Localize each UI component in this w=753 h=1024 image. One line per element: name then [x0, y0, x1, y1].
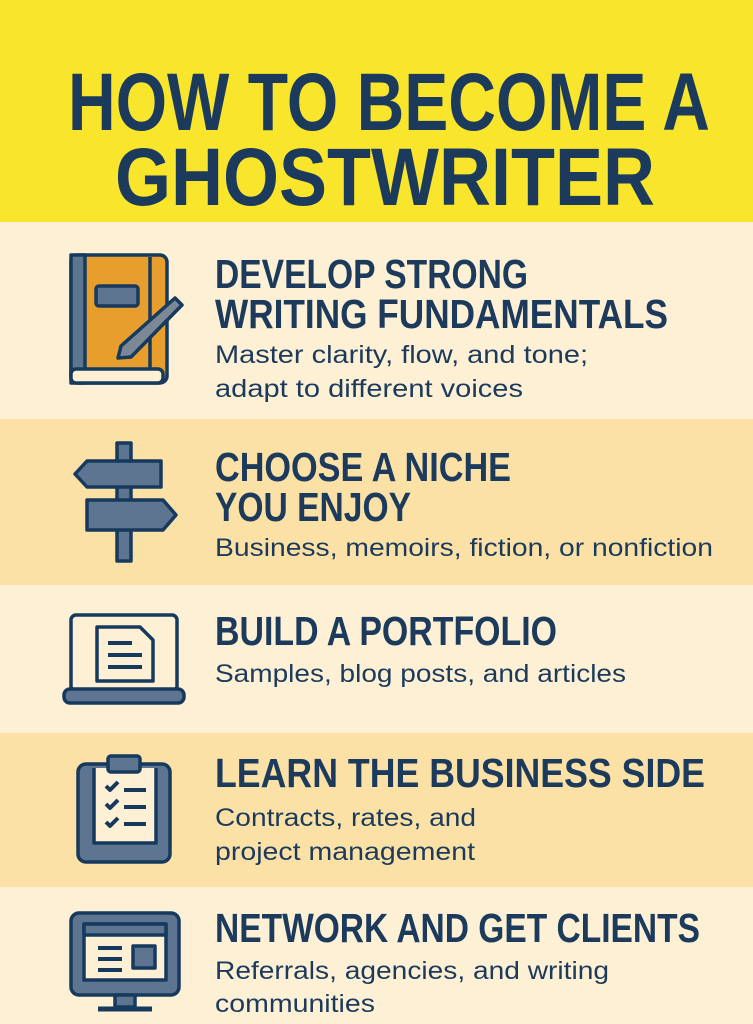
panel: network: communities — [215, 990, 375, 1018]
body text: Business, memoirs, fiction, or nonfiction — [215, 534, 713, 562]
panel: business side — [0, 733, 753, 887]
body text: Contracts, rates, and — [215, 804, 476, 832]
panel: writing fundamentals: WRITING FUNDAMENTALS — [215, 291, 668, 337]
title: GHOSTWRITER — [115, 132, 655, 223]
icon: laptop with document — [64, 615, 184, 703]
panel: niche: YOU ENJOY — [215, 484, 411, 530]
panel: business side: project management — [215, 838, 475, 866]
panel: portfolio — [64, 608, 626, 703]
panel: writing fundamentals — [0, 222, 753, 419]
title — [68, 57, 710, 223]
icon: monitor — [71, 913, 179, 1009]
body text: Samples, blog posts, and articles — [215, 660, 626, 688]
panel: niche — [0, 419, 753, 733]
body text: Referrals, agencies, and writing — [215, 957, 609, 985]
panel: network — [0, 887, 753, 1024]
heading: BUILD A PORTFOLIO — [215, 608, 557, 654]
icon: notebook with pencil — [71, 255, 182, 383]
header band — [0, 0, 753, 222]
heading: DEVELOP STRONG — [215, 251, 528, 297]
heading: CHOOSE A NICHE — [215, 444, 511, 490]
panel: writing fundamentals: adapt to different voices — [215, 375, 523, 403]
body text: Master clarity, flow, and tone; — [215, 341, 588, 369]
icon: signpost — [75, 443, 176, 561]
icon: clipboard checklist — [78, 756, 170, 862]
